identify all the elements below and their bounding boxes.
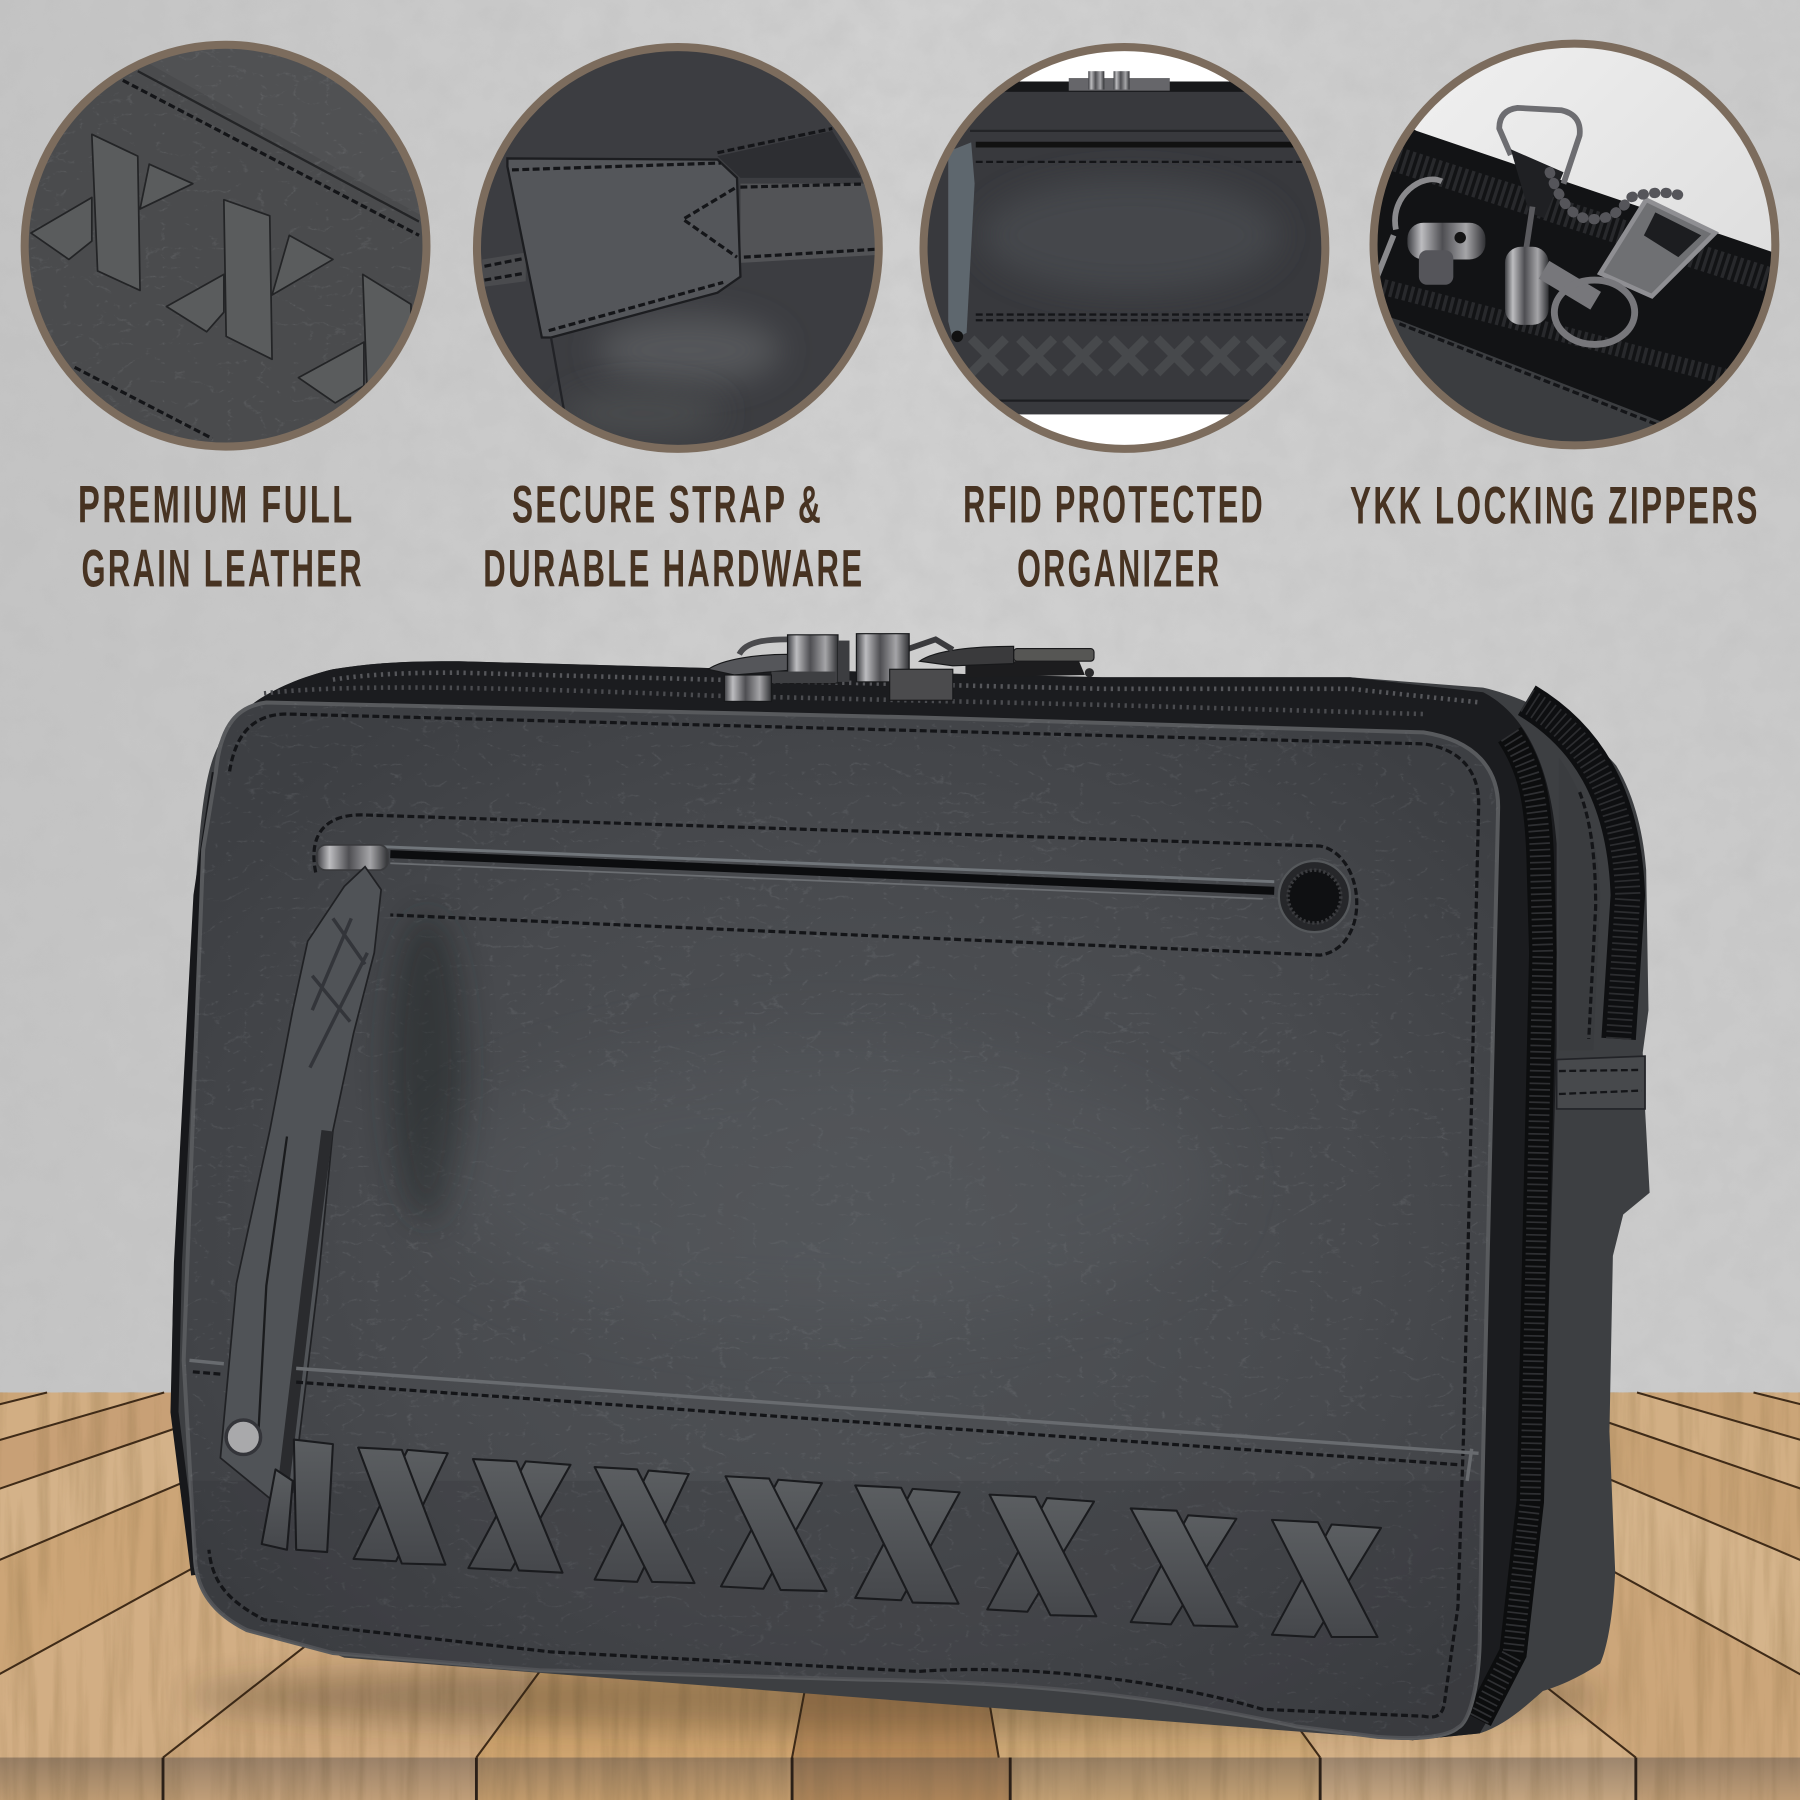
top metal zipper sliders <box>708 634 1094 701</box>
left zipper edge <box>174 773 216 1575</box>
perimeter stitching <box>209 714 1479 1717</box>
caption: RFID protected organizer: RFID PROTECTED <box>963 475 1265 534</box>
detail circle: secure strap and hardware <box>471 40 890 459</box>
wooden tabletop <box>0 1392 1800 1800</box>
leather texture <box>172 689 1515 1745</box>
caption: premium full grain leather: PREMIUM FULL <box>78 475 355 534</box>
product: black leather bag <box>172 634 1650 1745</box>
front leather panel <box>184 703 1498 1738</box>
bag shadow on table <box>184 1662 1607 1731</box>
strap loop <box>1557 1056 1645 1109</box>
mesh grommet <box>1279 861 1350 932</box>
detail circle: RFID protected organizer <box>918 40 1337 459</box>
leather braided zipper pull <box>220 867 381 1499</box>
lower band seam <box>189 1360 1479 1481</box>
caption: RFID protected organizer: ORGANIZER <box>1017 540 1221 599</box>
zipper slider <box>317 845 388 870</box>
bag silhouette and side leather <box>172 661 1650 1740</box>
caption: secure strap and durable hardware: SECURE STRAP & <box>512 475 823 534</box>
detail circle: YKK locking zippers <box>1366 34 1791 453</box>
detail circle: full grain leather <box>17 34 436 453</box>
caption: RFID protected organizer <box>963 475 1265 599</box>
caption: secure strap and durable hardware <box>483 475 864 599</box>
background: concrete wall <box>0 0 1800 1401</box>
pocket zipper <box>314 815 1357 955</box>
caption: secure strap and durable hardware: DURABLE HARDWARE <box>483 540 864 599</box>
top and front zipper band <box>218 661 1557 1740</box>
rivet <box>226 1420 261 1454</box>
caption: premium full grain leather <box>78 475 364 599</box>
X cross stitching <box>262 1440 1381 1637</box>
upper side panel and second zipper <box>1527 700 1628 1050</box>
caption: premium full grain leather: GRAIN LEATHER <box>82 540 364 599</box>
